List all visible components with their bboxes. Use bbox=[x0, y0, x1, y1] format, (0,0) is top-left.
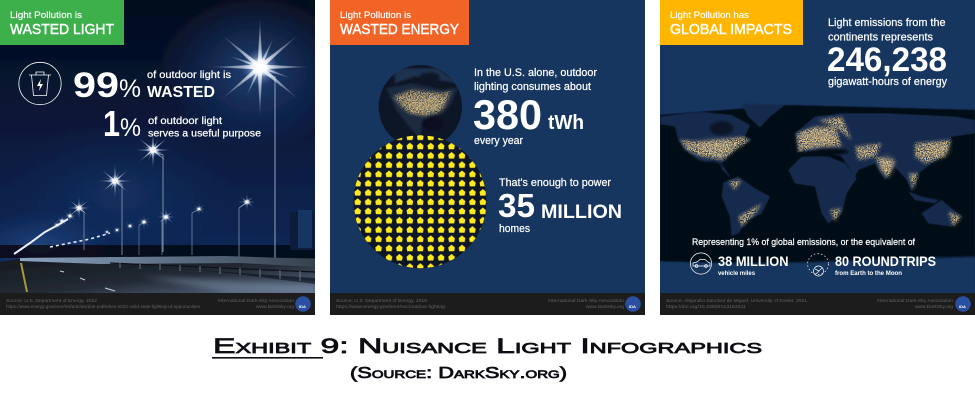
statistic: 80 roundtrips: from Earth to the Moon bbox=[835, 271, 902, 277]
statistic: 38 million vehicle miles: 38 MILLION bbox=[718, 253, 788, 269]
footer: source and IDA credit: International Dark-Sky Association bbox=[877, 298, 954, 303]
statistic: 99 percent wasted bbox=[73, 66, 231, 105]
panel: wasted light bbox=[0, 0, 350, 315]
footer: source and IDA credit bbox=[660, 293, 975, 315]
statistic: 1 percent useful: 1 bbox=[103, 103, 120, 144]
statistic: 246,238 gigawatt-hours bbox=[827, 17, 947, 88]
statistic: 246,238 gigawatt-hours: gigawatt-hours of energy bbox=[828, 76, 947, 88]
statistic: 1 percent useful bbox=[103, 103, 261, 144]
footer: source and IDA credit: https://www.energy.gov/eere/ssl/articles/doe-publishes-2022-solid-state-lighting-rd-opportunities bbox=[6, 304, 201, 309]
footer: source and IDA credit: International Dark-Sky Association bbox=[218, 298, 295, 303]
footer: source and IDA credit: Source: U.S. Department of Energy, 2022 bbox=[6, 298, 98, 303]
header label: WASTED LIGHT bbox=[10, 21, 114, 38]
footer: source and IDA credit: IDA bbox=[959, 304, 966, 309]
footer: source and IDA credit: https://doi.org/10.3390/rs13163311 bbox=[666, 304, 747, 309]
statistic: 380 tWh: tWh bbox=[548, 112, 584, 134]
statistic: 35 million homes: MILLION bbox=[541, 201, 622, 223]
footer: source and IDA credit: IDA bbox=[299, 304, 306, 309]
icon: car bbox=[690, 253, 712, 274]
statistic: 38 million vehicle miles: vehicle miles bbox=[718, 271, 756, 277]
statistic: 35 million homes: That's enough to power bbox=[499, 177, 611, 189]
statistic: 380 tWh: every year bbox=[474, 135, 523, 147]
footer: source and IDA credit: IDA bbox=[629, 304, 636, 309]
header label: Light Pollution has bbox=[670, 10, 749, 21]
statistic: 380 tWh: lighting consumes about bbox=[474, 81, 591, 93]
caption source: (Source: DarkSky.org) bbox=[350, 365, 567, 382]
statistic: 35 million homes: homes bbox=[499, 223, 530, 235]
header label bbox=[0, 0, 124, 45]
statistic: 35 million homes: 35 bbox=[498, 187, 535, 224]
footer: source and IDA credit: www.DarkSky.org bbox=[915, 304, 954, 309]
header label bbox=[660, 0, 803, 45]
header label: Light Pollution is bbox=[340, 10, 411, 21]
footer: source and IDA credit: Source: U.S. Department of Energy, 2016 bbox=[336, 298, 428, 303]
footer: source and IDA credit: https://www.energy.gov/eere/ssc/outdoor-lighting bbox=[336, 304, 446, 309]
statistic: 38 million vehicle miles bbox=[718, 253, 788, 277]
statistic: 99 percent wasted: WASTED bbox=[147, 84, 215, 101]
statistic: 246,238 gigawatt-hours: continents represents bbox=[828, 32, 933, 44]
statistic: 99 percent wasted: 99 bbox=[73, 66, 119, 105]
panel background bbox=[330, 0, 645, 293]
header label: GLOBAL IMPACTS bbox=[670, 21, 792, 38]
globe: North America at night bbox=[379, 65, 462, 148]
header label: WASTED ENERGY bbox=[340, 21, 459, 38]
statistic: 99 percent wasted: of outdoor light is bbox=[147, 70, 231, 81]
footer: source and IDA credit: Source: Alejandro Sanchez de Miguel, University of Exeter, 2021 bbox=[666, 298, 808, 303]
text: representing 1 percent: Representing 1% of global emissions, or the equivalent of bbox=[692, 237, 915, 248]
street-light night photograph bbox=[0, 0, 350, 293]
statistic: 1 percent useful: % bbox=[120, 114, 141, 142]
statistic: 246,238 gigawatt-hours: Light emissions from the bbox=[828, 17, 946, 29]
footer: source and IDA credit bbox=[0, 293, 315, 315]
header label bbox=[330, 0, 469, 45]
statistic: 1 percent useful: serves a useful purpose bbox=[148, 128, 261, 140]
icon: trash can with lightning bolt bbox=[19, 62, 61, 105]
footer: source and IDA credit bbox=[330, 293, 645, 315]
statistic: 246,238 gigawatt-hours: 246,238 bbox=[827, 41, 947, 79]
header label: Light Pollution is bbox=[10, 10, 82, 21]
icon: earth and moon orbit bbox=[808, 254, 828, 276]
footer: source and IDA credit: www.DarkSky.org bbox=[256, 304, 295, 309]
footer: source and IDA credit: International Dark-Sky Association bbox=[548, 298, 625, 303]
statistic: 80 roundtrips bbox=[835, 253, 936, 277]
footer: source and IDA credit: www.DarkSky.org bbox=[586, 304, 625, 309]
statistic: 380 tWh: In the U.S. alone, outdoor bbox=[474, 67, 597, 79]
statistic: 80 roundtrips: 80 ROUNDTRIPS bbox=[835, 253, 936, 269]
world map at night bbox=[660, 104, 975, 293]
caption title: Exhibit 9: Nuisance Light Infographics bbox=[213, 334, 762, 358]
panel: wasted energy bbox=[330, 0, 645, 315]
statistic: 380 tWh: 380 bbox=[473, 91, 542, 138]
panel: global impacts bbox=[660, 0, 975, 315]
statistic: 99 percent wasted: % bbox=[119, 75, 141, 103]
statistic: 1 percent useful: of outdoor light bbox=[148, 116, 222, 127]
dot circle of yellow homes bbox=[350, 133, 490, 271]
statistic: 35 million homes bbox=[498, 177, 622, 235]
statistic: 380 tWh bbox=[473, 67, 597, 147]
panel background bbox=[660, 0, 975, 293]
